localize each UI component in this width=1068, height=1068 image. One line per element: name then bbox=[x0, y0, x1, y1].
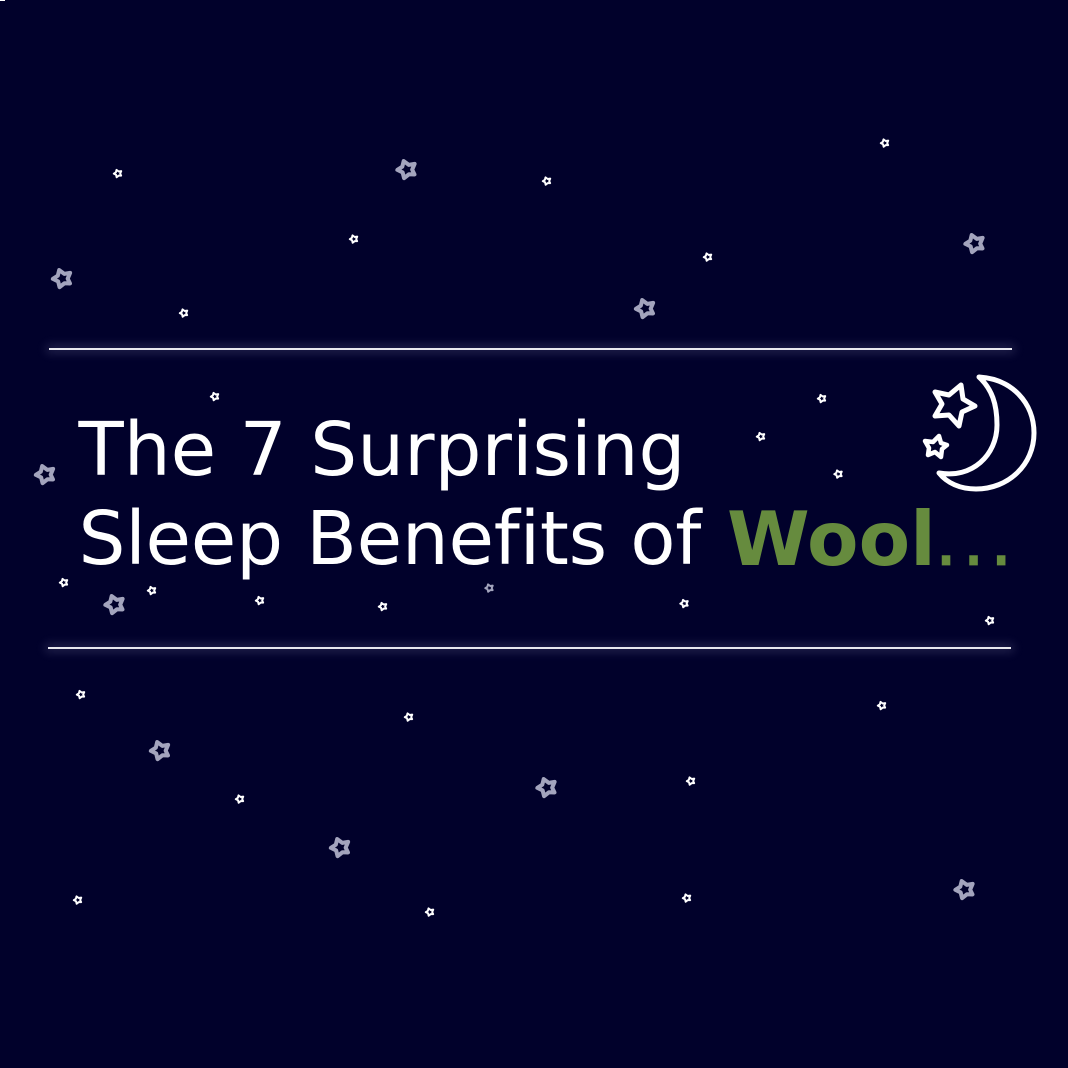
title: ... bbox=[934, 494, 1017, 583]
corner mark bbox=[0, 0, 5, 1]
top divider line bbox=[49, 348, 1012, 350]
title: Wool bbox=[727, 495, 936, 583]
title: Sleep Benefits of bbox=[78, 496, 701, 582]
bottom divider line bbox=[48, 647, 1011, 649]
title: The 7 Surprising bbox=[78, 407, 686, 493]
